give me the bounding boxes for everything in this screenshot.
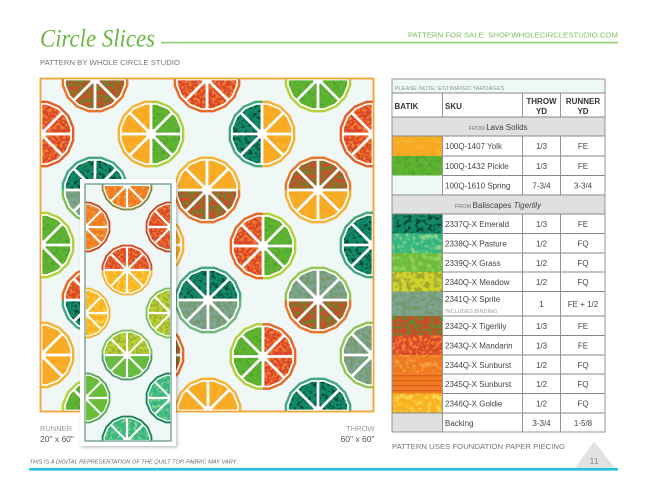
fabric rows: 7-3/4 bbox=[532, 182, 551, 190]
fabric rows: 1/3 bbox=[536, 220, 548, 229]
runner caption: RUNNER bbox=[40, 424, 73, 433]
fabric rows: 2342Q-X Tigerlily bbox=[445, 322, 506, 331]
fabric rows: 100Q-1407 Yolk bbox=[445, 142, 503, 151]
note row bbox=[392, 79, 605, 93]
header row: YD bbox=[536, 107, 547, 116]
runner caption bbox=[40, 424, 74, 444]
designer credit: PATTERN BY WHOLE CIRCLE STUDIO bbox=[40, 60, 181, 67]
runner quilt bbox=[80, 178, 180, 450]
fabric rows: FE + 1/2 bbox=[568, 300, 599, 309]
fabric rows: FE bbox=[578, 162, 588, 171]
fabric rows: 1/2 bbox=[536, 361, 548, 370]
fabric rows: Backing bbox=[445, 419, 473, 428]
fabric rows bbox=[445, 142, 599, 428]
runner slice left 2 bbox=[86, 288, 110, 338]
header rule bbox=[161, 42, 618, 43]
runner slice top bbox=[102, 184, 152, 210]
fabric rows: 1/2 bbox=[536, 278, 548, 287]
throw caption: 60" x 60" bbox=[341, 434, 374, 444]
fabric rows: 1-5/8 bbox=[574, 419, 593, 428]
fabric rows: FQ bbox=[577, 278, 589, 287]
fabric rows: FQ bbox=[577, 259, 589, 268]
fabric rows: FE bbox=[578, 142, 588, 151]
section band: lava solids bbox=[392, 117, 605, 136]
runner caption: 20" x 60" bbox=[40, 434, 74, 444]
yardage table bbox=[392, 79, 605, 432]
fabric rows: 1/2 bbox=[536, 259, 548, 268]
fabric rows: 2346Q-X Goldie bbox=[445, 400, 503, 408]
fabric rows: 1/2 bbox=[536, 380, 548, 389]
note row: PLEASE NOTE: ESTIMATED YARDAGES bbox=[394, 86, 505, 92]
fabric rows: 2337Q-X Emerald bbox=[445, 220, 509, 229]
throw caption bbox=[341, 424, 375, 444]
throw slice row 1 bbox=[62, 79, 352, 112]
throw slice row 4 bbox=[41, 212, 373, 280]
header row: BATIK bbox=[394, 102, 419, 111]
header row: YD bbox=[577, 107, 589, 116]
fabric rows: 1/3 bbox=[536, 342, 548, 350]
throw caption: THROW bbox=[346, 424, 375, 433]
footnote: THIS IS A DIGITAL REPRESENTATION OF THE QUILT TOP, FABRIC MAY VARY bbox=[30, 460, 238, 466]
fabric rows: 1 bbox=[539, 300, 544, 309]
runner slice left 1 bbox=[86, 202, 110, 252]
throw slice row 3 bbox=[62, 157, 351, 223]
runner slice right 3 bbox=[146, 372, 170, 424]
section band: baliscapes: FROM Baliscapes Tigerlily bbox=[455, 201, 542, 210]
runner slice right 1 bbox=[146, 202, 170, 252]
fabric rows: 1/3 bbox=[536, 162, 548, 171]
fabric rows: FQ bbox=[577, 400, 589, 408]
fabric rows: 3-3/4 bbox=[532, 419, 551, 428]
fabric rows: 1/2 bbox=[536, 240, 548, 248]
throw slice row 5 bbox=[62, 267, 351, 333]
throw slice row 7 bbox=[62, 378, 352, 411]
fabric rows: 2343Q-X Mandarin bbox=[445, 342, 513, 350]
section band: baliscapes bbox=[392, 195, 605, 214]
fabric rows: 100Q-1432 Pickle bbox=[445, 162, 509, 171]
throw quilt bbox=[40, 78, 374, 412]
fabric rows: FE bbox=[578, 342, 588, 350]
fabric rows: INCLUDES BINDING bbox=[445, 309, 497, 315]
fabric rows: FE bbox=[578, 322, 588, 331]
fabric rows: 2340Q-X Meadow bbox=[445, 278, 510, 287]
runner slice bottom bbox=[102, 416, 152, 440]
page number triangle bbox=[575, 442, 615, 468]
fabric rows: 2345Q-X Sunburst bbox=[445, 380, 512, 389]
runner slice centre 1 bbox=[102, 245, 152, 295]
runner slice right 2 bbox=[146, 288, 170, 338]
runner slice left 3 bbox=[86, 372, 110, 424]
table grid bbox=[392, 79, 605, 432]
fabric rows: FQ bbox=[577, 240, 589, 248]
fabric rows: 1/3 bbox=[536, 142, 548, 151]
page number triangle: 11 bbox=[590, 456, 599, 466]
fabric rows: FQ bbox=[577, 380, 589, 389]
header row bbox=[394, 97, 600, 116]
fabric swatches bbox=[392, 136, 442, 432]
fabric rows: 1/2 bbox=[536, 400, 548, 408]
fabric rows: 2341Q-X Sprite bbox=[445, 295, 501, 304]
runner slice centre 2 bbox=[102, 330, 152, 380]
shop link text: PATTERN FOR SALE: SHOP.WHOLECIRCLESTUDIO.COM bbox=[408, 30, 618, 40]
fabric rows: 3-3/4 bbox=[574, 182, 593, 190]
fabric rows: FE bbox=[578, 220, 588, 229]
fabric rows: FQ bbox=[577, 361, 589, 370]
section band: lava solids: FROM Lava Solids bbox=[468, 123, 528, 132]
throw slice row 2 bbox=[41, 100, 373, 168]
header row: THROW bbox=[526, 97, 557, 106]
header row: RUNNER bbox=[566, 97, 600, 106]
fabric rows: 2339Q-X Grass bbox=[445, 259, 501, 268]
fabric rows: 1/3 bbox=[536, 322, 548, 331]
fabric rows: 2344Q-X Sunburst bbox=[445, 361, 512, 370]
foundation piecing note: PATTERN USES FOUNDATION PAPER PIECING bbox=[392, 442, 565, 451]
fabric rows: 100Q-1610 Spring bbox=[445, 182, 510, 190]
throw slice row 6 bbox=[41, 322, 373, 390]
fabric rows: 2338Q-X Pasture bbox=[445, 240, 507, 248]
footer rule bbox=[29, 468, 618, 471]
title: Circle Slices bbox=[40, 24, 155, 52]
header row: SKU bbox=[445, 102, 462, 111]
